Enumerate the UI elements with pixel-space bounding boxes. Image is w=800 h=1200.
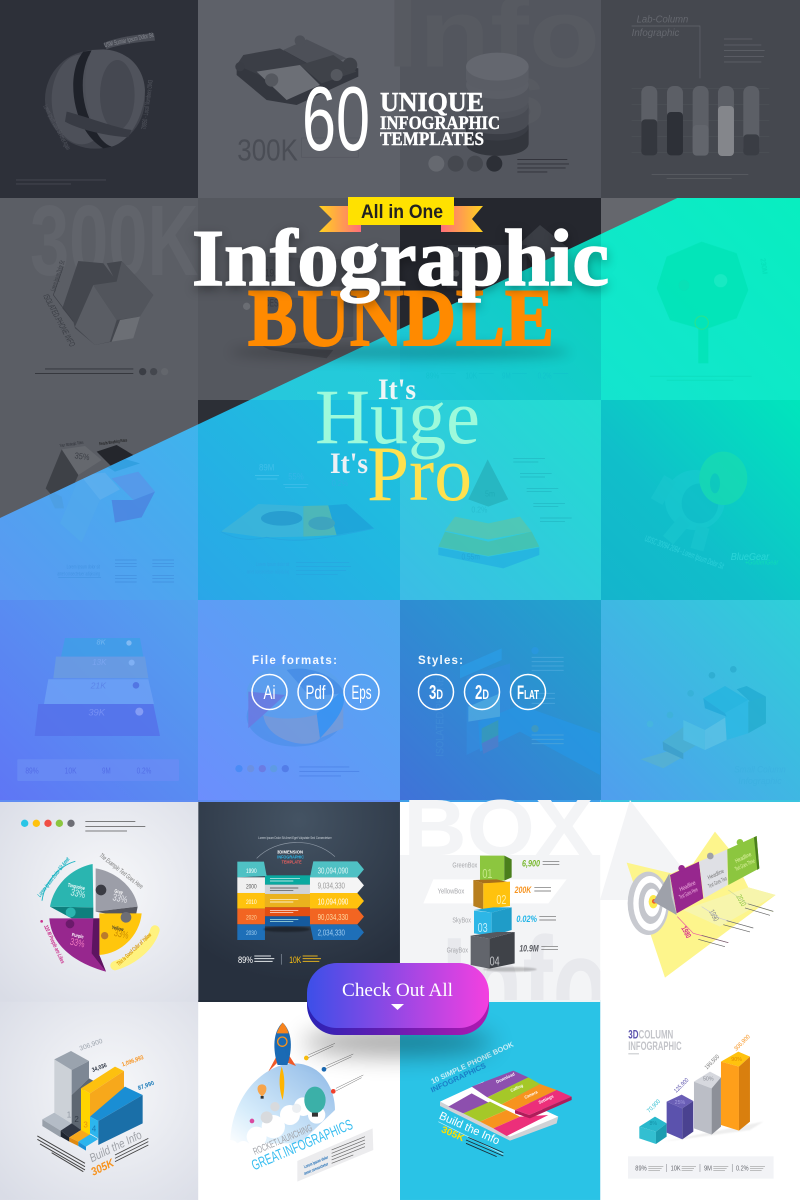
faint tile: stacked steps: 9M xyxy=(102,766,111,776)
faint tile: isometric app screens xyxy=(434,647,600,775)
tile: isometric bar graph: 2 xyxy=(74,1115,79,1124)
tile: large 300K cube template: 300K xyxy=(30,185,198,297)
tile: puzzle template: 300K xyxy=(237,134,298,168)
faint tile: gears xyxy=(643,452,779,571)
heading: Infographic: Infographic xyxy=(192,215,609,303)
tile: arrow hitting target: Headline xyxy=(707,868,726,881)
tile: dimension template on dark xyxy=(198,800,400,1002)
tile: 3D column infographic: 89% xyxy=(635,1164,647,1173)
tile: 3D puzzle pie chart: Lorem Ipsum Dolor Sit Amet xyxy=(37,856,72,899)
tile: isometric bar graph xyxy=(0,1002,198,1200)
tile: stacked boxes: GrayBox xyxy=(447,946,468,955)
tile: globe template: Lorem Ipsum Dolor Sit Amet Again xyxy=(41,104,71,151)
tile: 3D column infographic: 306,900 xyxy=(733,1034,752,1052)
tile: isometric phone on cyan xyxy=(400,1000,600,1200)
faint tile: stacked steps: 39K xyxy=(88,707,106,717)
tile: arrow hitting target xyxy=(600,800,800,1002)
tile: lab column template: Lab-Column xyxy=(637,15,689,26)
button shadow xyxy=(303,1028,493,1056)
tile: stacked boxes: 10.9M xyxy=(519,944,539,954)
tile: arrow hitting target: 1980 xyxy=(679,925,693,940)
button: Check Out All xyxy=(307,963,489,1035)
panel: styles: 3D xyxy=(429,682,443,704)
tile: 3D column infographic: 0.2% xyxy=(736,1164,749,1173)
heading: BUNDLE: BUNDLE xyxy=(248,272,554,363)
tile: dark card with triangle xyxy=(447,225,567,288)
tile: globe template xyxy=(16,32,155,184)
tile: stacked cylinders template xyxy=(387,0,600,172)
faint tile: small isometric columns: Small Column xyxy=(734,765,786,775)
faint tile: stats on teal card: 10K xyxy=(465,371,478,380)
faint tile: isometric blocks: amet consectetuer adipiscing xyxy=(57,572,100,578)
ribbon: All in One xyxy=(319,197,483,232)
faint tile: world map: 89M xyxy=(259,463,274,473)
faint tile: stats on teal card: 9M xyxy=(502,371,511,380)
panel: file formats xyxy=(252,655,379,710)
ribbon: All in One: All in One xyxy=(361,202,443,223)
faint tile: stacked steps: 21K xyxy=(90,681,107,691)
tile: dark arrows template xyxy=(243,257,367,358)
tile: stacked boxes: GreenBox xyxy=(452,860,478,869)
faint tile: stats on teal card: 89% xyxy=(426,371,439,380)
faint tile: stacked steps: 89% xyxy=(25,766,39,776)
tile: dimension template on dark: 2010 xyxy=(246,899,257,906)
tile: large 300K cube template: Lorem Ipsum Dolor Sit xyxy=(48,259,67,292)
tile: stacked boxes: 02 xyxy=(496,893,506,907)
tile: isometric bar graph: 1 xyxy=(67,1110,72,1119)
heading: 60 unique infographic templates: 60 xyxy=(302,69,370,170)
heading: 60 unique infographic templates: INFOGRAPHIC xyxy=(380,113,500,134)
tile: isometric bar graph: 34,036 xyxy=(91,1063,108,1074)
tile: rocket launching: amet consectetur xyxy=(303,1161,329,1176)
tile: isometric phone on cyan: INFOGRAPHICS xyxy=(429,1061,487,1094)
tile: arrow hitting target: Headline xyxy=(679,880,697,893)
tile: dimension template on dark: 3DIMENSION xyxy=(277,850,303,856)
tile: puzzle template xyxy=(235,35,358,168)
faint tile: stats on teal card: 0.2% xyxy=(538,371,552,380)
tile: 3D puzzle pie chart: 33% xyxy=(112,892,128,906)
tile: isometric phone on cyan: Camera xyxy=(524,1089,539,1100)
tile: stacked boxes: Info xyxy=(442,910,608,1059)
tile: stacked boxes: 6,900 xyxy=(522,859,540,869)
tile: isometric bar graph: 87,990 xyxy=(137,1081,156,1092)
tile: 3D puzzle pie chart: 320 M People are Likes xyxy=(42,924,65,965)
tile: dimension template on dark: 2020 xyxy=(246,915,257,922)
tile: stacked boxes: SkyBox xyxy=(452,916,471,925)
tile: globe template: 78850 - Local Numbers 0943 xyxy=(141,79,155,130)
tile: isometric phone on cyan: Build the Info xyxy=(437,1110,501,1147)
tile: 3D column infographic: 125,900 xyxy=(673,1077,691,1094)
faint tile: world map: 55% xyxy=(288,471,304,481)
tile: 3D column infographic: 10K xyxy=(671,1164,681,1173)
heading: 60 unique infographic templates: TEMPLATES xyxy=(380,129,484,150)
tile: 3D puzzle pie chart: Turquoise xyxy=(67,883,85,892)
tile: 3D puzzle pie chart: Purple xyxy=(71,932,84,941)
tile: arrow hitting target: Text Goes Here xyxy=(679,887,700,901)
tagline: It's Huge It's Pro xyxy=(315,373,480,517)
tile: dimension template on dark: 10K xyxy=(289,955,302,965)
tile: stacked boxes: 03 xyxy=(478,921,488,935)
tile: dimension template on dark: 2000 xyxy=(246,883,257,890)
faint tile: world map xyxy=(221,463,374,575)
tile: 3D column infographic: 70,900 xyxy=(646,1098,662,1114)
faint tile: pyramid: 0.2% xyxy=(471,506,487,515)
tile: rocket launching: Lorem Ipsum dolor xyxy=(303,1154,329,1169)
faint tile: isometric blocks: Lorem Ipsum dolor sit xyxy=(67,564,100,570)
tile: 3D column infographic: 9M xyxy=(704,1164,712,1173)
tagline: It's Huge It's Pro: It's xyxy=(378,373,416,406)
tile: isometric phone on cyan: 10 SIMPLE PHONE BOOK xyxy=(430,1039,516,1086)
tile: stacked boxes: BOX xyxy=(403,783,593,872)
faint tile: hexagon tree: 230M xyxy=(759,258,770,275)
panel: styles: Styles: xyxy=(418,655,463,667)
faint tile: world map: amet consectetuer adipiscing xyxy=(247,569,289,575)
tile: arrow hitting target: Headline xyxy=(734,852,753,865)
faint tile: world map: 0.2% xyxy=(332,478,349,488)
tile: 3D column infographic: INFOGRAPHIC xyxy=(628,1039,682,1053)
tile: isometric phone on cyan: 305K xyxy=(440,1124,466,1143)
tile: isometric bar graph: 306,900 xyxy=(79,1038,104,1053)
faint tile: stacked steps: 13K xyxy=(92,658,107,667)
faint tile: pyramid xyxy=(438,459,572,568)
tile: rocket launching xyxy=(198,1000,400,1200)
tile: arrow hitting target: 1990 xyxy=(707,908,721,923)
tile: 3D column infographic: 3DCOLUMN xyxy=(628,1028,673,1042)
tile: rocket launching: ROCKET.LAUNCHING xyxy=(252,1123,314,1158)
tile: stacked boxes: 04 xyxy=(490,954,500,968)
tagline: It's Huge It's Pro: Huge xyxy=(315,373,480,460)
faint tile: gears: +GoldenGear xyxy=(745,557,779,566)
tile: isometric bar graph: 3 xyxy=(83,1120,88,1129)
tile: 3D puzzle pie chart: Yellow xyxy=(111,925,124,933)
faint tile: pyramid: 5m xyxy=(485,489,495,499)
faint tile: small isometric columns xyxy=(641,666,766,768)
tagline: It's Huge It's Pro: It's xyxy=(330,447,368,480)
tile: boxes template under overlay: 35% xyxy=(74,450,90,462)
tile: stacked boxes: 01 xyxy=(482,867,492,881)
tile: dark arrows template: 19,000 xyxy=(265,268,290,280)
tile: arrow hitting target: Text Goes Two xyxy=(708,876,729,890)
panel: file formats: Pdf xyxy=(306,683,326,704)
tile: 3D puzzle pie chart: 33% xyxy=(69,937,86,950)
tile: lab column template xyxy=(632,15,769,179)
tile: 3D column infographic: 50% xyxy=(703,1077,714,1083)
faint tile: isometric app screens: ISOLATED.PHONE xyxy=(434,676,446,757)
tile: isometric phone on cyan: Download xyxy=(495,1071,516,1084)
tile: dimension template on dark: Lorem Ipsum Dolor Sit Amet Eget Vulputate Sed Consectetuer xyxy=(258,836,332,840)
faint tile: pyramid: 0.55m xyxy=(461,552,480,561)
heading shadow under BUNDLE xyxy=(230,344,570,360)
tile: stacked boxes: 0.02% xyxy=(516,914,537,924)
faint tile: 3D pie chart xyxy=(235,663,359,776)
tile: dimension template on dark: 30,094,090 xyxy=(318,865,348,875)
tile: isometric bar graph: 1,096,993 xyxy=(121,1055,145,1068)
faint tile: stats on teal card xyxy=(432,373,568,378)
button: Check Out All: Check Out All xyxy=(342,981,453,1001)
tile: 3D puzzle pie chart: 33% xyxy=(70,887,86,901)
tile: large 300K cube template xyxy=(30,185,198,375)
tile: 3D column infographic: 196,500 xyxy=(704,1054,721,1071)
tile: dimension template on dark: 2,034,330 xyxy=(318,927,345,937)
tile: isometric bar graph: 305K xyxy=(89,1157,117,1179)
faint tile: small isometric columns: Infographic xyxy=(738,776,782,786)
faint tile: world map: Lorem Ipsum dolor sit xyxy=(256,562,290,568)
tile: isometric bar graph: Build the Info xyxy=(87,1128,144,1165)
tile: dimension template on dark: 9,034,330 xyxy=(318,881,345,891)
tile: dark arrows template: DESIGN xyxy=(265,298,290,310)
tile: boxes template under overlay: Results Breathing Rates xyxy=(99,437,127,446)
heading: 60 unique infographic templates xyxy=(302,69,500,170)
faint tile: stacked steps: 8K xyxy=(97,637,107,646)
tile: dimension template on dark: INFOGRAPHIC xyxy=(277,855,304,861)
panel: file formats: File formats: xyxy=(252,655,337,667)
tile: 3D puzzle pie chart: Gray xyxy=(114,889,124,896)
tile: 3D puzzle pie chart: The Example Text Goes Here xyxy=(98,852,144,891)
tile: dimension template on dark: 10,094,090 xyxy=(318,896,348,906)
tile: arrow hitting target: 2010 xyxy=(734,893,748,908)
tile: stacked cylinders template: s xyxy=(497,46,545,142)
panel: styles: FLAT xyxy=(517,683,539,704)
tile: isometric phone on cyan: Settings xyxy=(538,1093,555,1105)
tile: lab column template: Infographic xyxy=(632,28,679,39)
tile: large 300K cube template: ISOLATED.PHONE INFO xyxy=(41,292,77,348)
panel: file formats: Ai xyxy=(264,683,276,704)
tile: globe template: USM Sumtar Ipsum Dolor Sit xyxy=(104,32,154,49)
tile: 3D column infographic: 8% xyxy=(649,1121,657,1127)
tile: stacked boxes: 200K xyxy=(514,885,532,895)
faint tile: stacked steps xyxy=(17,637,179,781)
tile: isometric phone on cyan: Calling xyxy=(510,1083,524,1093)
tile: 3D column infographic xyxy=(600,1000,800,1200)
tile: dimension template on dark: 1990 xyxy=(246,868,257,875)
tile: 3D column infographic: 25% xyxy=(675,1100,686,1106)
tile: dimension template on dark: 89% xyxy=(238,955,253,965)
tile: isometric bar graph: 4 xyxy=(92,1125,97,1134)
faint tile: gears: UDSC 30094 2094 - Lorem Ipsum Dolor Sit xyxy=(643,533,725,571)
tile: stacked boxes xyxy=(400,783,608,1059)
panel: styles: 2D xyxy=(475,682,489,704)
tile: 3D puzzle pie chart: This Is Good Color of Yellow xyxy=(116,932,153,967)
tile: rocket launching: GREAT.INFOGRAPHICS xyxy=(249,1117,356,1174)
tile: dimension template on dark: 2030 xyxy=(246,930,257,937)
tile: boxes template under overlay xyxy=(46,437,133,508)
colour gradient overlay below diagonal xyxy=(0,198,800,800)
tile: 3D puzzle pie chart: 33% xyxy=(113,928,130,942)
dark template tiles background xyxy=(0,0,800,600)
tile: boxes template under overlay: Your Strategic Titles xyxy=(59,440,84,448)
faint tile: isometric blocks xyxy=(46,457,174,582)
faint tile: gears: BlueGear xyxy=(731,552,770,563)
faint tile: stacked steps: 0.2% xyxy=(137,766,152,776)
panel: file formats: Eps xyxy=(352,683,372,704)
tile: 3D column infographic: 90% xyxy=(731,1057,742,1063)
tile: dimension template on dark: TEMPLATE xyxy=(282,860,302,866)
tagline: It's Huge It's Pro: Pro xyxy=(367,430,472,517)
faint tile: hexagon tree xyxy=(650,242,770,381)
tile: dimension template on dark: 90,034,330 xyxy=(318,912,348,922)
tile: arrow hitting target: Text Goes Three xyxy=(734,858,756,873)
tile: 3D puzzle pie chart xyxy=(0,800,198,1002)
panel: styles xyxy=(418,655,546,710)
heading: 60 unique infographic templates: UNIQUE xyxy=(380,87,484,117)
faint tile: stacked steps: 10K xyxy=(65,766,77,776)
tile: stacked boxes: YellowBox xyxy=(438,887,465,896)
